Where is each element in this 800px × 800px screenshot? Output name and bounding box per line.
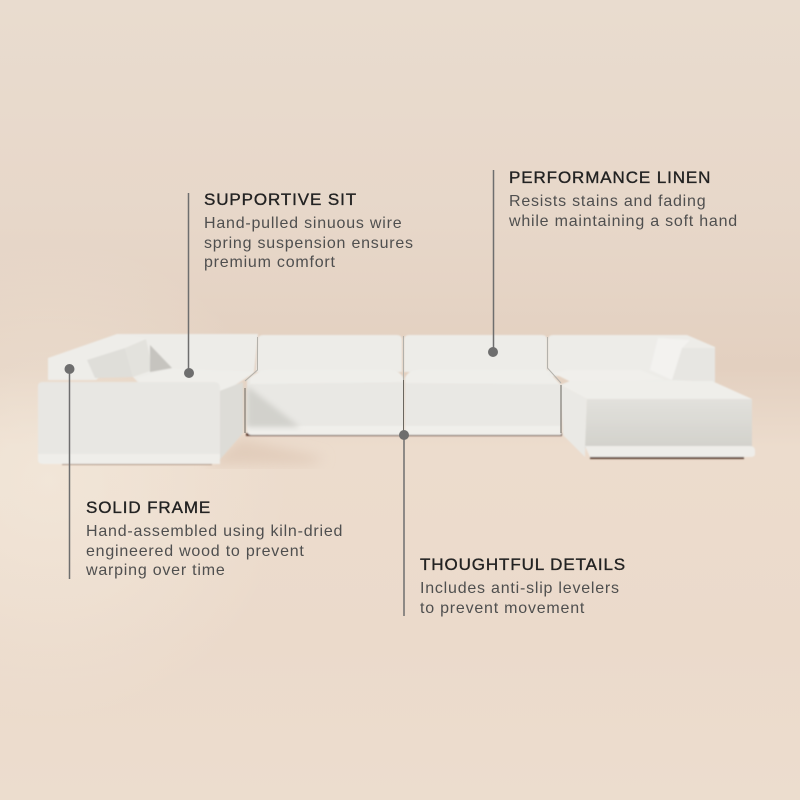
callout: thoughtful details: THOUGHTFUL DETAILS <box>420 555 626 574</box>
callout: solid frame <box>86 498 343 579</box>
callout: supportive sit: SUPPORTIVE SIT <box>204 190 357 209</box>
left block front <box>38 382 220 464</box>
chaise front <box>585 399 752 448</box>
left back section <box>117 334 258 395</box>
callout: solid frame: SOLID FRAME <box>86 498 211 517</box>
seams <box>245 336 561 433</box>
right arm <box>672 348 715 382</box>
chaise top <box>560 381 752 399</box>
callout line: performance linen <box>488 170 498 357</box>
callout: performance linen: while maintaining a soft hand <box>509 212 738 230</box>
left arm <box>48 334 148 380</box>
module 2 seat <box>247 370 404 435</box>
right back module <box>548 335 715 382</box>
left block side <box>216 382 243 464</box>
callout: performance linen: Resists stains and fading <box>509 193 706 210</box>
soft shadows <box>150 345 172 372</box>
callout: thoughtful details <box>420 555 626 616</box>
callout: performance linen: PERFORMANCE LINEN <box>509 168 711 187</box>
left seat <box>138 369 254 393</box>
chaise base <box>585 446 755 457</box>
module 3 back <box>404 335 547 372</box>
callout: supportive sit <box>204 190 414 271</box>
module 3 seat <box>405 370 561 435</box>
callout: thoughtful details: Includes anti-slip levelers <box>420 580 620 597</box>
chaise side <box>560 385 587 457</box>
callout line: supportive sit <box>184 193 194 378</box>
dark base lines <box>246 433 562 436</box>
callout: solid frame: engineered wood to prevent <box>86 542 305 560</box>
callout line: thoughtful details <box>399 430 409 616</box>
callout: supportive sit: Hand-pulled sinuous wire <box>204 215 402 232</box>
callout line: solid frame <box>64 364 74 579</box>
callout: performance linen <box>509 168 738 230</box>
floor shadow <box>205 438 325 466</box>
callout: solid frame: warping over time <box>86 562 226 579</box>
callout: thoughtful details: to prevent movement <box>420 600 585 616</box>
sofa <box>38 334 755 465</box>
module 2 back <box>256 335 402 372</box>
callout: supportive sit: spring suspension ensures <box>204 234 414 252</box>
callout: supportive sit: premium comfort <box>204 254 336 271</box>
callout: solid frame: Hand-assembled using kiln-dried <box>86 523 343 540</box>
